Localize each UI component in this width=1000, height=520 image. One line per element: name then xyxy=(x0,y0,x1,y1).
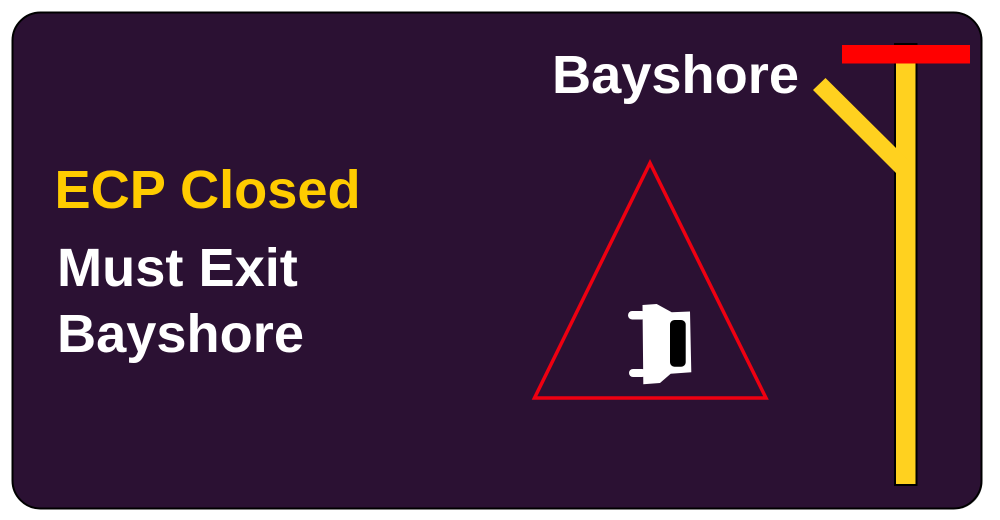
text block: Must Exit Bayshore xyxy=(57,238,304,364)
exit ramp xyxy=(813,78,916,174)
text block: Must Exit Bayshore: Bayshore xyxy=(57,304,304,364)
heading: ECP Closed: ECP Closed xyxy=(54,160,361,220)
main road xyxy=(895,44,916,485)
warning triangle xyxy=(534,163,766,398)
icon: warning triangle with car xyxy=(534,163,766,398)
text block: Must Exit Bayshore: Must Exit xyxy=(57,238,298,298)
car icon xyxy=(628,304,691,384)
label: Bayshore exit: Bayshore xyxy=(552,45,799,105)
icon: road diagram xyxy=(813,44,970,485)
road closure bar xyxy=(842,45,970,64)
